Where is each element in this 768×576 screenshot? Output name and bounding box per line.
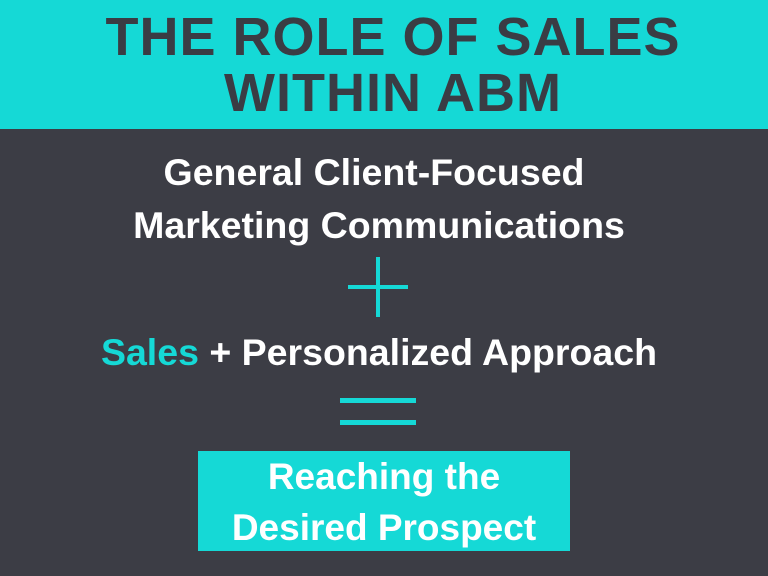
result box: Reaching the [268, 456, 500, 497]
title: THE ROLE OF SALES [105, 7, 681, 67]
icon: equals [340, 398, 416, 425]
text block: general communications: Marketing Communications [133, 204, 625, 246]
text block: general communications: General Client-Focused [164, 151, 584, 193]
title band [0, 0, 768, 129]
result box [198, 451, 570, 551]
result box: Desired Prospect [232, 507, 536, 548]
text block: general communications [133, 151, 625, 246]
icon: plus [348, 257, 408, 317]
title: WITHIN ABM [224, 63, 562, 123]
text block: sales approach: Sales + Personalized Approach [101, 331, 657, 373]
title [105, 7, 681, 123]
